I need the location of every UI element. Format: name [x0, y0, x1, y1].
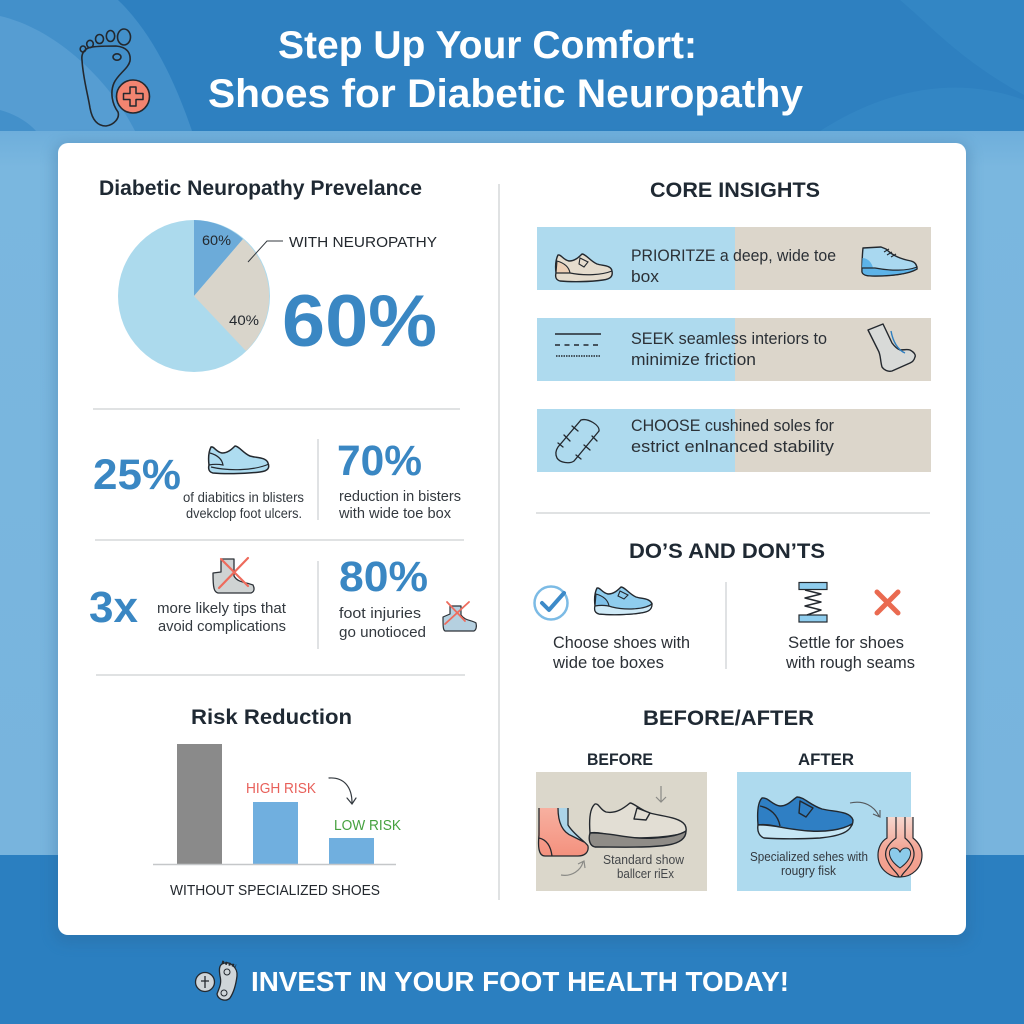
- icon: seam lines: [555, 334, 601, 356]
- icon: healthy foot heart: [878, 817, 922, 877]
- stat: 80%: [339, 553, 428, 641]
- icon: sore foot: [538, 808, 588, 856]
- panel: core insights: [537, 179, 931, 472]
- insight row 1: PRIORITZE a deep, wide toe: [631, 247, 836, 265]
- stat: 3x: more likely tips that: [157, 601, 286, 617]
- insight row 2: minimize friction: [631, 351, 756, 369]
- panel: stats: [89, 437, 476, 649]
- icon: crossed-out boot: [213, 558, 254, 593]
- do: text: wide toe boxes: [552, 654, 664, 672]
- icon: standard shoe: [589, 803, 686, 847]
- icon: beige shoe: [556, 254, 612, 282]
- stat: 25%: [93, 451, 304, 521]
- icon: blue shoe: [209, 446, 269, 474]
- insight row 1: [537, 227, 931, 290]
- footer icon: foot and cross: [196, 962, 237, 1000]
- bar chart: [153, 744, 401, 864]
- after card: Specialized sehes with: [750, 850, 868, 864]
- stat: 80%: foot injuries: [339, 606, 421, 622]
- pie chart: [118, 220, 283, 372]
- stat: 80%: go unotioced: [339, 625, 426, 641]
- don't: text: Settle for shoes: [788, 634, 904, 652]
- pie chart: 60%: [202, 233, 231, 248]
- background: bottom band: [0, 855, 1024, 1024]
- card shadow: [54, 143, 970, 943]
- insight row 2: SEEK seamless interiors to: [631, 330, 827, 348]
- heading: do's and don'ts: DO’S AND DON’TS: [629, 540, 825, 563]
- stat: 3x: avoid complications: [158, 619, 286, 635]
- arrow: curved: [850, 802, 880, 817]
- main white card: [58, 143, 966, 935]
- icon: cushioned sole: [556, 420, 599, 463]
- icon: blue shoe: [758, 797, 853, 839]
- bar chart: HIGH RISK: [246, 781, 316, 797]
- after card: [737, 750, 922, 891]
- do: blue shoe icon: [595, 587, 652, 615]
- don't: text: [785, 634, 915, 672]
- stat: 70%: with wide toe box: [338, 506, 452, 522]
- stat: 70%: 70%: [337, 437, 422, 485]
- stat: 80%: 80%: [339, 553, 428, 601]
- heading: core insights: CORE INSIGHTS: [650, 179, 820, 202]
- insight row 3: [537, 409, 931, 472]
- panel: prevalence: [99, 177, 437, 372]
- bar chart: LOW RISK: [334, 818, 401, 834]
- icon: sock: [868, 324, 915, 371]
- stat: 3x: [89, 583, 286, 635]
- stat: 25%: of diabitics in blisters: [183, 490, 304, 505]
- heading: prevalence: Diabetic Neuropathy Prevelance: [99, 177, 422, 200]
- title: [208, 24, 804, 116]
- before card: BEFORE: [587, 750, 653, 769]
- stat: 70%: reduction in bisters: [339, 489, 461, 505]
- pie chart: 40%: [229, 313, 259, 328]
- after card: AFTER: [798, 750, 854, 769]
- do: text: Choose shoes with: [553, 634, 690, 652]
- insight row 2: [537, 318, 931, 381]
- icon: foot with medical cross: [80, 29, 150, 126]
- stat: 25%: 25%: [93, 451, 181, 499]
- don't: text: with rough seams: [785, 654, 915, 672]
- chart caption: WITHOUT SPECIALIZED SHOES: [170, 883, 380, 899]
- panel: do's and don'ts: [534, 540, 915, 672]
- arrow: high to low risk: [329, 778, 356, 804]
- stat: 70%: [337, 437, 461, 522]
- arrow: curved up: [561, 861, 585, 875]
- stat: 3x: 3x: [89, 583, 139, 632]
- header band: [0, 0, 1024, 131]
- don't: cross icon: [877, 592, 898, 613]
- heading: before/after: BEFORE/AFTER: [643, 707, 814, 730]
- insight row 3: estrict enlnanced stability: [631, 438, 835, 456]
- icon: crossed-out shoe: [443, 602, 476, 631]
- after card: rougry fisk: [781, 864, 837, 878]
- background: middle band: [0, 131, 1024, 855]
- don't: spring icon: [799, 582, 827, 622]
- heading: risk reduction: Risk Reduction: [191, 706, 352, 729]
- title: Step Up Your Comfort:: [278, 24, 697, 67]
- stat: 25%: dvekclop foot ulcers.: [186, 506, 302, 521]
- icon: blue laced shoe: [862, 247, 917, 276]
- do: text: [552, 634, 690, 672]
- before card: Standard show: [603, 853, 685, 867]
- big stat 60%: 60%: [282, 281, 437, 362]
- panel: before/after: [536, 707, 922, 891]
- arrow: down: [656, 786, 666, 802]
- insight row 3: CHOOSE cushined soles for: [631, 417, 834, 435]
- before card: [536, 750, 707, 891]
- before card: ballcer riEx: [617, 867, 675, 881]
- panel: risk reduction: [153, 706, 401, 899]
- footer call to action: INVEST IN YOUR FOOT HEALTH TODAY!: [251, 966, 789, 997]
- do: check icon: [534, 586, 568, 620]
- insight row 1: box: [631, 268, 660, 286]
- title: Shoes for Diabetic Neuropathy: [208, 72, 804, 116]
- pie label: WITH NEUROPATHY: [289, 234, 437, 251]
